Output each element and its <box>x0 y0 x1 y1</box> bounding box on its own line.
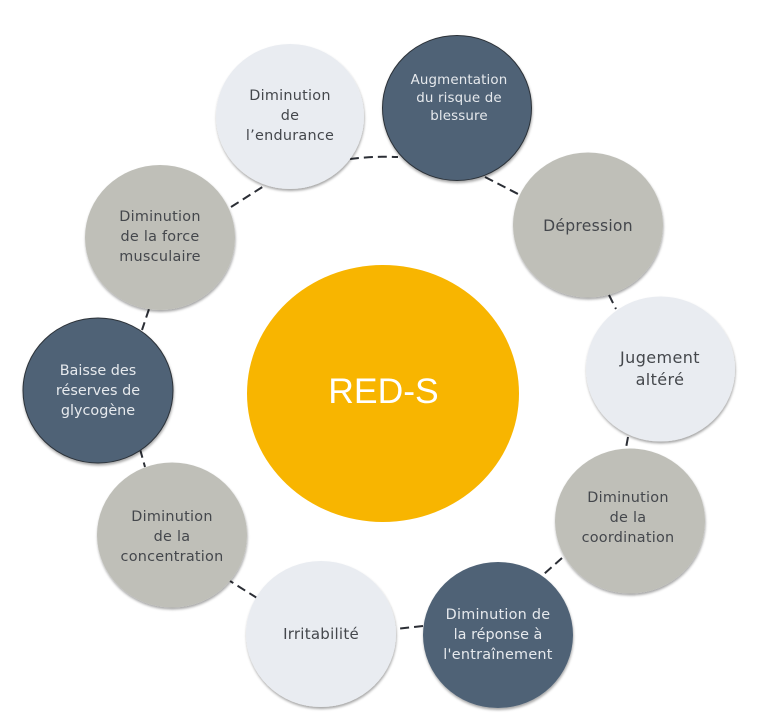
node: Diminution de la coordination: de la <box>610 510 646 526</box>
node: Diminution de la concentration <box>97 462 247 608</box>
node: Diminution de la coordination: Diminution <box>587 490 669 506</box>
node: Dépression: Dépression <box>543 217 633 235</box>
central circle: RED-S <box>247 265 519 522</box>
node: Diminution de l'endurance: Diminution <box>249 88 331 104</box>
node: Diminution de la réponse à l'entraînement <box>423 562 573 708</box>
dashed connecting ring <box>140 157 628 629</box>
node: Baisse des réserves de glycogène: glycogène <box>61 403 135 419</box>
node: Irritabilité <box>246 561 396 707</box>
node: Diminution de la réponse à l'entraînement: la réponse à <box>454 627 542 643</box>
node: Diminution de la concentration: Diminution <box>131 509 213 525</box>
node: Baisse des réserves de glycogène: Baisse des <box>60 363 136 379</box>
node: Augmentation du risque de blessure: Augmentation <box>411 73 507 88</box>
node: Jugement altéré: Jugement <box>619 348 700 367</box>
node: Irritabilité: Irritabilité <box>283 625 359 643</box>
node: Baisse des réserves de glycogène: réserves de <box>56 383 140 399</box>
node: Diminution de la coordination: coordination <box>582 530 674 546</box>
node: Augmentation du risque de blessure: blessure <box>430 109 488 124</box>
central circle: RED-S: RED-S <box>328 371 439 411</box>
node: Diminution de la force musculaire: musculaire <box>119 249 201 265</box>
node: Diminution de la réponse à l'entraînement: Diminution de <box>446 607 550 623</box>
node: Augmentation du risque de blessure <box>382 36 532 180</box>
node: Diminution de l'endurance: de <box>281 108 299 124</box>
node: Augmentation du risque de blessure: du risque de <box>416 91 502 106</box>
node: Diminution de l'endurance <box>216 44 364 189</box>
node: Diminution de la réponse à l'entraînement: l'entraînement <box>443 647 553 663</box>
node: Diminution de l'endurance: l’endurance <box>246 128 334 144</box>
node: Diminution de la force musculaire <box>85 165 235 310</box>
node: Dépression <box>513 152 663 298</box>
node: Diminution de la coordination <box>555 448 705 594</box>
node: Jugement altéré <box>586 296 735 442</box>
node: Diminution de la concentration: concentration <box>121 549 223 565</box>
node: Jugement altéré: altéré <box>636 370 684 389</box>
node: Diminution de la force musculaire: de la force <box>121 229 199 245</box>
node: Diminution de la concentration: de la <box>154 529 190 545</box>
node: Diminution de la force musculaire: Diminution <box>119 209 201 225</box>
node: Baisse des réserves de glycogène <box>23 318 173 463</box>
